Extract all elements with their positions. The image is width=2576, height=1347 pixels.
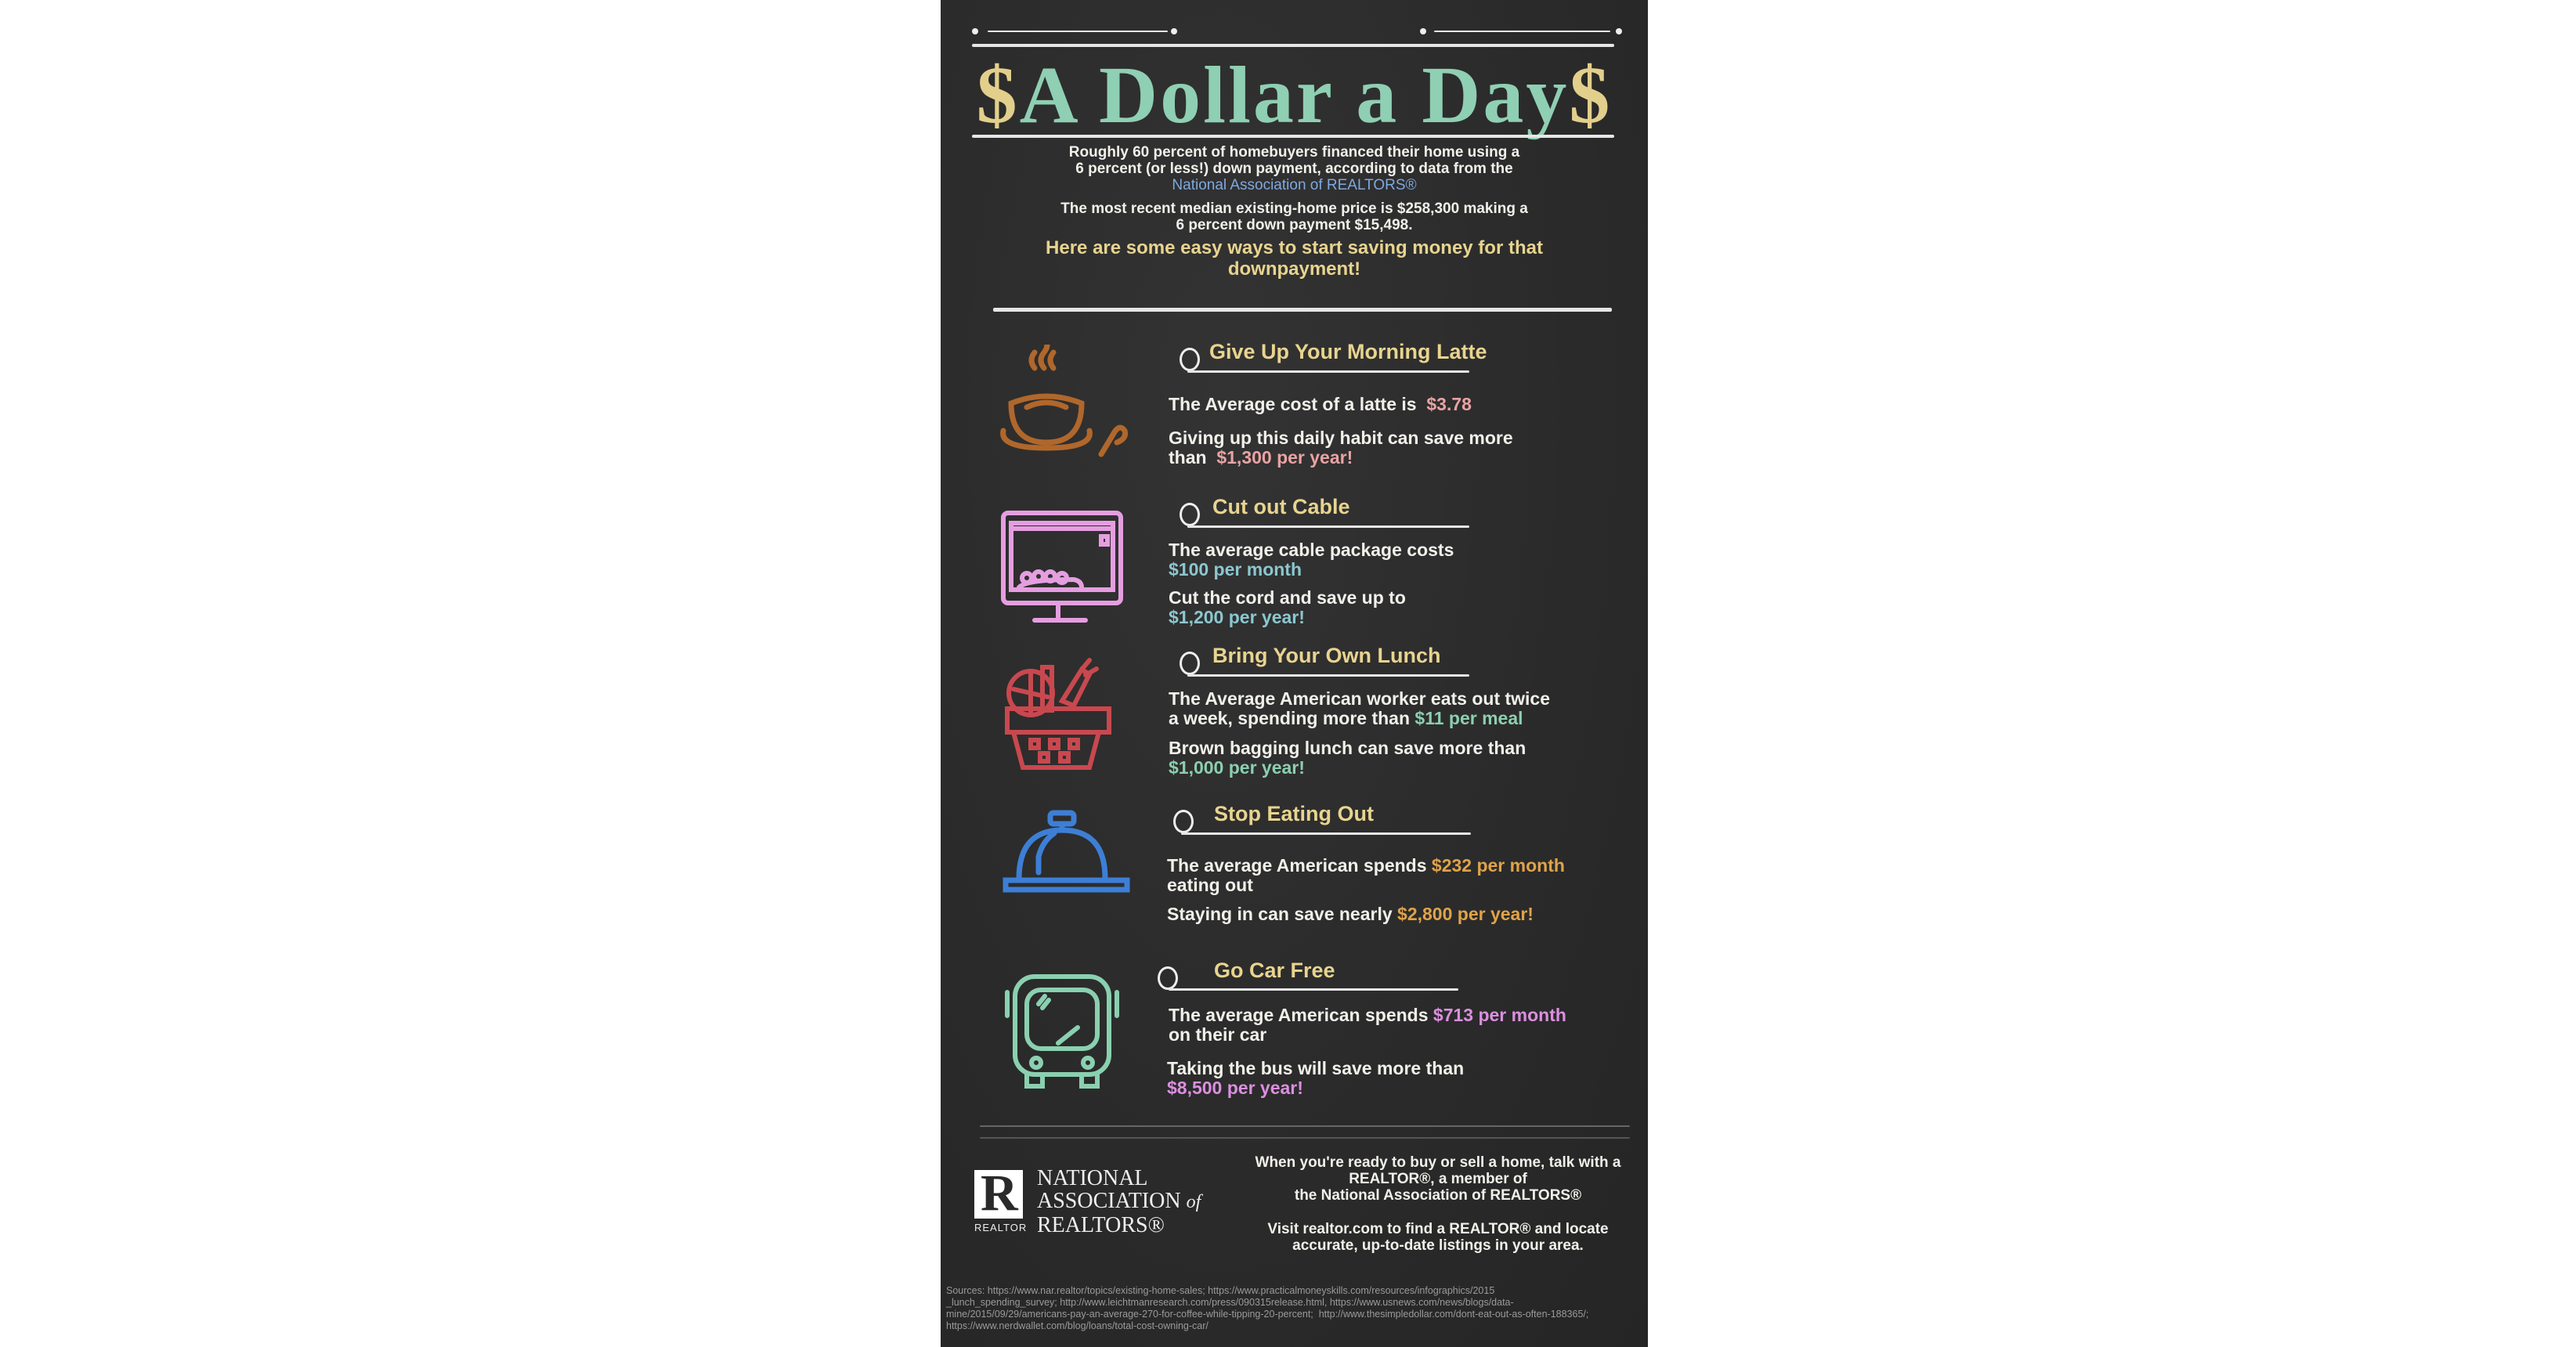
- section: stop eating out: Staying in can save nearly $2,800 per year!: [1167, 904, 1534, 924]
- section: latte: [1000, 340, 1513, 468]
- text: The average cable package costs: [1169, 540, 1454, 560]
- icon: cloche: [1003, 810, 1129, 893]
- logo: National Association of Realtors: NATIONAL: [1037, 1166, 1148, 1190]
- footer text: When you're ready to buy or sell a home, talk with a: [1255, 1154, 1620, 1171]
- section: lunch: $1,000 per year!: [1169, 757, 1305, 778]
- icon: tv: [1001, 511, 1123, 623]
- icon: coffee cup: [1000, 345, 1128, 457]
- sources: https://www.nerdwallet.com/blog/loans/total-cost-owning-car/: [946, 1320, 1209, 1331]
- logo: National Association of Realtors: R: [981, 1165, 1018, 1222]
- logo: National Association of Realtors: REALTORS®: [1037, 1213, 1165, 1237]
- text: The Average cost of a latte is $3.78: [1169, 394, 1472, 414]
- heading: [1173, 802, 1471, 835]
- section: cable: $1,200 per year!: [1169, 607, 1305, 627]
- section: car free: Taking the bus will save more than: [1167, 1058, 1464, 1078]
- chalkboard: accurate, up-to-date listings in your area.: [1292, 1237, 1584, 1254]
- icon: bus: [1005, 974, 1119, 1089]
- heading: [1180, 340, 1487, 373]
- footer text: the National Association of REALTORS®: [1295, 1187, 1581, 1204]
- text: [1169, 540, 1454, 580]
- section: latte: Giving up this daily habit can save more: [1169, 428, 1513, 448]
- text: [1167, 855, 1565, 895]
- intro text: 6 percent (or less!) down payment, according to data from the: [1075, 161, 1513, 177]
- title: $A Dollar a Day$: [977, 50, 1612, 140]
- logo: National Association of Realtors: [974, 1165, 1203, 1237]
- section: car free: [1005, 959, 1566, 1098]
- heading: Give Up Your Morning Latte: [1209, 340, 1487, 363]
- heading: [1180, 495, 1469, 528]
- footer text: REALTOR®, a member of: [1349, 1171, 1527, 1187]
- heading: Stop Eating Out: [1214, 802, 1374, 825]
- section: stop eating out: [1003, 802, 1565, 924]
- text: $100 per month: [1169, 559, 1302, 580]
- text: The average American spends $713 per month: [1169, 1005, 1566, 1025]
- icon: lunch basket: [1005, 658, 1111, 770]
- intro text: National Association of REALTORS®: [1172, 177, 1417, 193]
- sources: Sources: https://www.nar.realtor/topics/existing-home-sales; https://www.practicalmoneyskills.com/resources/infographics/2015: [946, 1285, 1494, 1296]
- intro text: Roughly 60 percent of homebuyers financed their home using a: [1069, 144, 1519, 161]
- intro text: [1069, 144, 1519, 193]
- logo: National Association of Realtors: ASSOCIATION of: [1037, 1189, 1201, 1213]
- heading: [1180, 644, 1469, 677]
- chalkboard: [941, 0, 1648, 1347]
- section: cable: [1001, 495, 1469, 627]
- heading: Go Car Free: [1214, 959, 1335, 982]
- callout: saving: [1046, 237, 1543, 280]
- text: a week, spending more than $11 per meal: [1169, 708, 1523, 728]
- text: [1169, 688, 1550, 728]
- section: cable: Cut the cord and save up to: [1169, 587, 1406, 608]
- text: The Average American worker eats out twice: [1169, 688, 1550, 709]
- footer text: [1255, 1154, 1621, 1204]
- chalkboard: 6 percent down payment $15,498.: [1176, 217, 1413, 233]
- text: [1169, 1005, 1566, 1045]
- text: The average American spends $232 per month: [1167, 855, 1565, 876]
- sources: [946, 1285, 1588, 1331]
- section: lunch: Brown bagging lunch can save more than: [1169, 738, 1526, 758]
- top decoration: [972, 28, 1622, 34]
- heading: Cut out Cable: [1212, 495, 1350, 518]
- text: eating out: [1167, 875, 1253, 895]
- section: latte: than $1,300 per year!: [1169, 447, 1353, 468]
- text: on their car: [1169, 1024, 1266, 1045]
- section: car free: $8,500 per year!: [1167, 1078, 1303, 1098]
- logo: National Association of Realtors: REALTOR: [974, 1222, 1027, 1233]
- chalkboard: Visit realtor.com to find a REALTOR® and locate: [1267, 1221, 1609, 1237]
- callout: saving: Here are some easy ways to start saving money for that: [1046, 237, 1543, 258]
- heading: Bring Your Own Lunch: [1212, 644, 1441, 667]
- chalkboard: The most recent median existing-home price is $258,300 making a: [1060, 200, 1528, 217]
- sources: mine/2015/09/29/americans-pay-an-average-270-for-coffee-while-tipping-20-percent; http://www.thesimpledollar.com/dont-eat-out-as-often-188365/;: [946, 1309, 1588, 1320]
- callout: saving: downpayment!: [1228, 258, 1360, 280]
- section: lunch: [1005, 644, 1550, 778]
- heading: [1158, 959, 1458, 991]
- sources: _lunch_spending_survey; http://www.leichtmanresearch.com/press/090315release.html, https://www.usnews.com/news/blogs/data-: [946, 1297, 1514, 1308]
